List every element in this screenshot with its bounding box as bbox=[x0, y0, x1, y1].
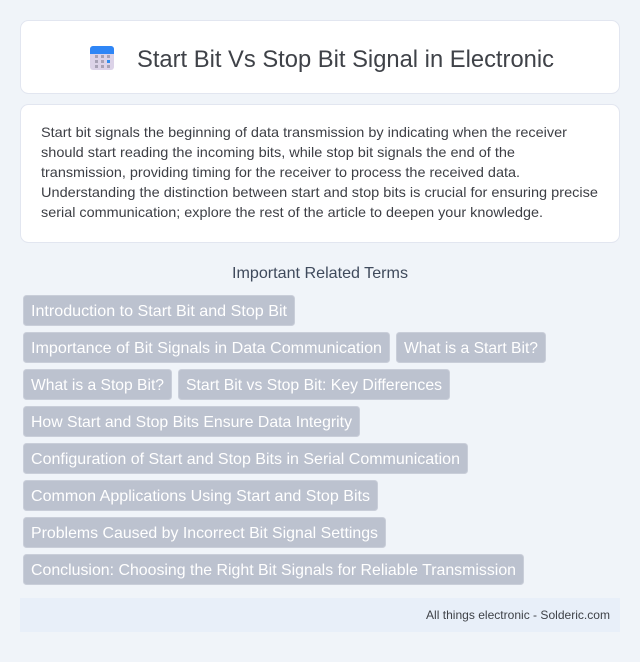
heading: Important Related Terms: Important Related Terms bbox=[232, 265, 408, 282]
chip bbox=[178, 370, 450, 400]
chip bbox=[24, 554, 524, 584]
chip: Start Bit vs Stop Bit: Key Differences bbox=[186, 377, 442, 394]
text block: intro: serial communication; explore the rest of the article to deepen your knowledge. bbox=[41, 204, 543, 220]
chip list: related terms bbox=[24, 296, 546, 584]
chip: Importance of Bit Signals in Data Communication bbox=[31, 340, 382, 357]
text block: intro: transmission, providing timing for the receiver to process the received data. bbox=[41, 164, 520, 180]
text block: intro: Understanding the distinction between start and stop bits is crucial for ensuring precise bbox=[41, 184, 598, 200]
chip: What is a Start Bit? bbox=[404, 340, 538, 357]
chip: What is a Stop Bit? bbox=[31, 377, 164, 394]
chip: Problems Caused by Incorrect Bit Signal Settings bbox=[31, 525, 378, 542]
icon: calendar bbox=[90, 46, 114, 70]
chip: Introduction to Start Bit and Stop Bit bbox=[31, 303, 288, 320]
chip bbox=[24, 332, 390, 362]
chip bbox=[24, 370, 172, 400]
chip bbox=[24, 296, 294, 326]
footer credit: All things electronic - Solderic.com bbox=[426, 608, 610, 622]
chip bbox=[24, 480, 378, 510]
text block: intro: Start bit signals the beginning of data transmission by indicating when the receiver bbox=[41, 124, 567, 140]
title: Start Bit Vs Stop Bit Signal in Electronic bbox=[137, 46, 554, 73]
chip bbox=[24, 406, 360, 436]
panel: intro paragraph bbox=[20, 104, 620, 242]
title panel bbox=[20, 20, 620, 94]
text block: intro: should start reading the incoming bits, while stop bit signals the end of the bbox=[41, 144, 515, 160]
chip bbox=[24, 518, 386, 548]
chip: How Start and Stop Bits Ensure Data Integrity bbox=[31, 414, 352, 431]
chip: Common Applications Using Start and Stop Bits bbox=[31, 488, 370, 505]
chip: Conclusion: Choosing the Right Bit Signals for Reliable Transmission bbox=[31, 562, 516, 579]
chip: Configuration of Start and Stop Bits in Serial Communication bbox=[31, 451, 460, 468]
footer bar bbox=[20, 598, 620, 632]
text block: intro bbox=[41, 124, 598, 220]
chip bbox=[396, 332, 546, 362]
chip bbox=[24, 444, 468, 474]
